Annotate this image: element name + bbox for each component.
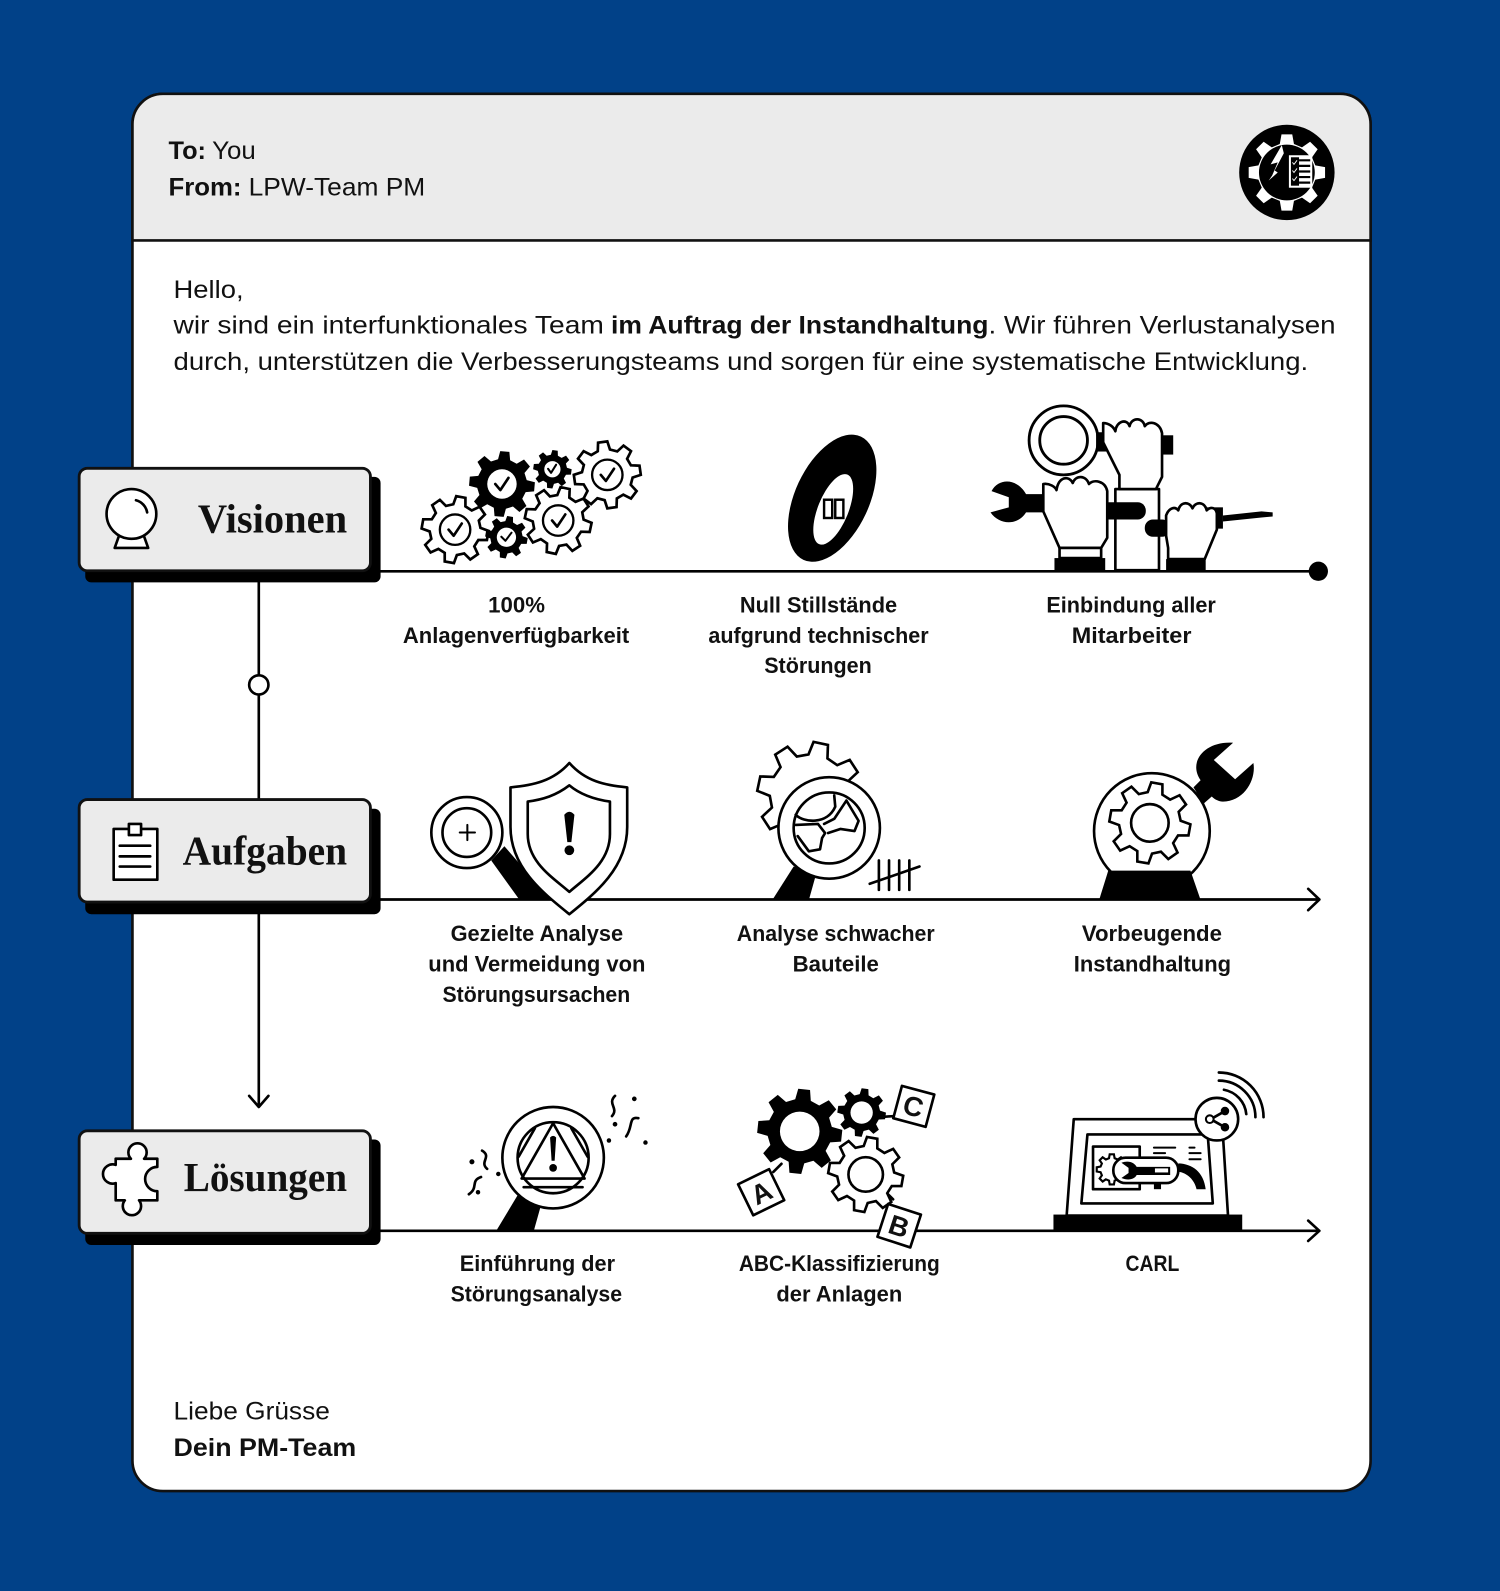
icon: CARL laptop with share symbol bbox=[1053, 1073, 1264, 1231]
text: label Einbindung aller Mitarbeiter: Einbindung aller bbox=[1046, 592, 1216, 617]
text: label Einführung der Störungsanalyse: Störungsanalyse bbox=[451, 1281, 622, 1306]
text: greeting and introduction: im Auftrag der Instandhaltung bbox=[611, 311, 988, 339]
text: label Analyse schwacher Bauteile: Bauteile bbox=[793, 952, 879, 977]
text: label Null Stillstände bbox=[708, 592, 929, 678]
text: label Analyse schwacher Bauteile: Analyse schwacher bbox=[737, 921, 935, 946]
text: recipient and sender: From: bbox=[168, 173, 242, 201]
icon: crystal ball bbox=[107, 489, 156, 548]
arrow: Lösungen timeline bbox=[376, 1221, 1319, 1241]
text: greeting and introduction: durch, unterstützen die Verbesserungsteams und sorgen für eine systematische Entwicklung. bbox=[174, 348, 1308, 376]
icon: ABC classified gears bbox=[738, 1085, 934, 1247]
tag: A: A bbox=[746, 1174, 777, 1211]
text: label 100% Anlagenverfügbarkeit bbox=[403, 592, 630, 648]
arrow: vertical connector bbox=[249, 578, 268, 1107]
icon: magnifier and warning shield bbox=[431, 763, 627, 914]
icon: squiggles right bbox=[607, 1096, 648, 1145]
timeline: Visionen bbox=[376, 562, 1328, 581]
text: label Vorbeugende Instandhaltung bbox=[1074, 921, 1231, 977]
text: label 100% Anlagenverfügbarkeit: 100% bbox=[488, 592, 545, 617]
text: recipient and sender bbox=[168, 137, 425, 201]
text: label Gezielte Analyse: und Vermeidung von bbox=[428, 952, 645, 977]
tag: C bbox=[893, 1086, 934, 1127]
text: greeting and introduction: . Wir führen Verlustanalysen bbox=[988, 311, 1336, 339]
text: label Null Stillstände: Null Stillstände bbox=[740, 592, 897, 617]
tag: B bbox=[877, 1204, 921, 1247]
icon: clipboard bbox=[114, 824, 157, 880]
icon: gear in sphere with wrench bbox=[1094, 743, 1254, 900]
text: label ABC-Klassifizierung: der Anlagen bbox=[776, 1281, 902, 1306]
text: greeting and introduction bbox=[172, 276, 1336, 376]
text: label 100% Anlagenverfügbarkeit: Anlagenverfügbarkeit bbox=[403, 623, 630, 648]
arrow: Aufgaben timeline bbox=[376, 889, 1319, 910]
text: label Gezielte Analyse: Gezielte Analyse bbox=[451, 921, 623, 946]
text: label Vorbeugende Instandhaltung: Instandhaltung bbox=[1074, 952, 1231, 977]
text: label CARL: CARL bbox=[1126, 1251, 1179, 1276]
tag: A bbox=[738, 1169, 784, 1215]
text: label Null Stillstände: aufgrund technischer bbox=[708, 623, 929, 648]
text: label ABC-Klassifizierung: ABC-Klassifizierung bbox=[739, 1251, 940, 1276]
text: label Gezielte Analyse: Störungsursachen bbox=[442, 982, 630, 1007]
text: sign-off bbox=[174, 1398, 356, 1462]
text: label Einführung der Störungsanalyse: Einführung der bbox=[460, 1251, 615, 1276]
text: label Einführung der Störungsanalyse bbox=[451, 1251, 622, 1306]
icon: magnifier with warning triangle bbox=[469, 1096, 648, 1231]
icon: hands holding tools bbox=[991, 406, 1273, 571]
text: label Einbindung aller Mitarbeiter: Mitarbeiter bbox=[1072, 623, 1192, 648]
text: label Gezielte Analyse bbox=[428, 921, 645, 1007]
heading: Lösungen: Lösungen bbox=[184, 1154, 347, 1200]
text: label Null Stillstände: Störungen bbox=[764, 653, 872, 678]
text: label Vorbeugende Instandhaltung: Vorbeugende bbox=[1082, 921, 1222, 946]
text: sign-off: Liebe Grüsse bbox=[174, 1398, 330, 1426]
icon: gears with check marks bbox=[417, 437, 645, 568]
tag: B: B bbox=[885, 1209, 913, 1244]
icon: puzzle piece bbox=[103, 1143, 157, 1215]
heading: Aufgaben: Aufgaben bbox=[183, 828, 347, 873]
text: recipient and sender: You bbox=[212, 137, 256, 165]
text: label Analyse schwacher Bauteile bbox=[737, 921, 935, 977]
icon: team logo bbox=[1239, 125, 1335, 220]
text: recipient and sender: LPW-Team PM bbox=[249, 173, 425, 201]
text: label Einbindung aller Mitarbeiter bbox=[1046, 592, 1216, 648]
icon: magnifier over gear with tally marks bbox=[748, 733, 919, 900]
icon: tilted ring with pause symbol bbox=[770, 421, 895, 575]
tag: C: C bbox=[900, 1089, 927, 1124]
panel: email header bbox=[132, 94, 1371, 240]
text: recipient and sender: To: bbox=[168, 137, 206, 165]
heading: Visionen: Visionen bbox=[198, 496, 347, 542]
icon: squiggles left bbox=[469, 1151, 501, 1194]
text: greeting and introduction: wir sind ein interfunktionales Team bbox=[172, 311, 604, 339]
text: sign-off: Dein PM-Team bbox=[174, 1434, 356, 1462]
panel: email card bbox=[132, 94, 1371, 1491]
panel: Lösungen label bbox=[79, 1131, 381, 1245]
text: greeting and introduction: Hello, bbox=[174, 276, 244, 304]
panel: Aufgaben label bbox=[79, 800, 381, 914]
text: label ABC-Klassifizierung bbox=[739, 1251, 940, 1306]
panel: Visionen label bbox=[79, 468, 381, 582]
